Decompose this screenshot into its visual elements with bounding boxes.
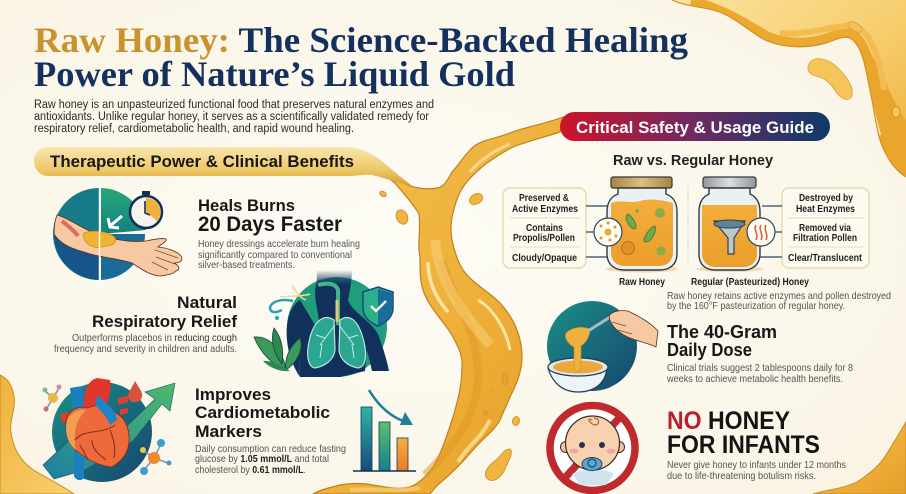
heading (667, 321, 777, 360)
heading (195, 385, 330, 441)
key figure: 20 Days Faster (198, 213, 342, 236)
description: silver-based treatments. (198, 259, 295, 271)
comparison: raw honey features: Propolis/Pollen (513, 232, 575, 244)
description (666, 362, 853, 385)
heading: Heals Burns (198, 196, 295, 215)
icon: lungs with shield and leaves (254, 270, 393, 377)
comparison: raw honey features: Contains (526, 222, 563, 234)
jar labels (619, 276, 809, 288)
heading: Improves (195, 385, 271, 404)
honey: small drops (379, 190, 521, 480)
description: cholesterol by 0.61 mmol/L. (195, 464, 306, 476)
panel: burns (53, 187, 360, 281)
intro paragraph: Raw honey is an unpasteurized functional food that preserves natural enzymes and (34, 99, 434, 111)
description: glucose by 1.05 mmol/L and total (195, 453, 329, 465)
honey: floating drop top right (808, 59, 852, 99)
heading: Daily Dose (667, 339, 752, 360)
icon: regular honey jar (696, 177, 775, 272)
honey: top right flow (672, 0, 906, 177)
warning heading: NO HONEY (667, 407, 790, 435)
panel: respiratory (54, 270, 393, 377)
comparison description: by the 160°F pasteurization of regular honey. (667, 300, 845, 312)
subheading: raw vs regular: Raw vs. Regular Honey (613, 152, 774, 169)
description: Daily consumption can reduce fasting (195, 443, 346, 455)
heading: therapeutic power (34, 147, 412, 186)
description (198, 238, 360, 271)
description: weeks to achieve metabolic health benefits. (666, 373, 843, 385)
description: Honey dressings accelerate burn healing (198, 238, 360, 250)
comparison: regular honey features: Clear/Translucent (788, 252, 862, 264)
icon: spoon pouring honey into bowl (547, 301, 658, 392)
description: significantly compared to conventional (198, 249, 352, 261)
description (54, 332, 237, 355)
heading: Natural (177, 293, 237, 312)
description: frequency and severity in children and adults. (54, 343, 237, 355)
warning heading (667, 407, 820, 459)
heading: Respiratory Relief (92, 312, 237, 331)
comparison: raw honey features: Cloudy/Opaque (512, 252, 577, 264)
comparison: raw honey features: Active Enzymes (512, 203, 578, 215)
honey: bottom left pool (0, 375, 74, 494)
intro paragraph: respiratory relief, cardiometabolic health, and rapid wound healing. (34, 123, 354, 135)
panel: daily dose (547, 301, 853, 392)
description: Never give honey to infants under 12 months (667, 459, 846, 471)
panel: cardiometabolic (42, 378, 416, 482)
divider (687, 183, 689, 264)
description (195, 443, 346, 476)
icon: heart with rising arrow and molecules (42, 378, 175, 482)
comparison description (667, 290, 891, 312)
intro paragraph: antioxidants. Unlike regular honey, it serves as a scientifically validated remedy for (34, 111, 429, 123)
comparison: regular honey features (760, 188, 869, 268)
heading (92, 293, 237, 331)
panel: infant warning (550, 406, 846, 490)
title: Power of Nature’s Liquid Gold (34, 54, 515, 94)
description: Outperforms placebos in reducing cough (72, 332, 237, 344)
intro paragraph (34, 99, 434, 135)
comparison: raw honey features (503, 188, 607, 268)
jar labels: Regular (Pasteurized) Honey (691, 276, 809, 288)
heading: safety guide: Critical Safety & Usage Guide (576, 119, 814, 137)
jar labels: Raw Honey (619, 276, 665, 288)
heading: The 40-Gram (667, 321, 777, 342)
description: due to life-threatening botulism risks. (667, 470, 816, 482)
honey: central stream (313, 117, 563, 494)
title: Raw Honey: The Science-Backed Healing (34, 20, 688, 60)
heading: therapeutic power: Therapeutic Power & Clinical Benefits (50, 152, 354, 171)
comparison: regular honey features: Removed via (799, 222, 851, 234)
bar chart: falling markers (353, 390, 416, 471)
icon: arm with honey dressing and stopwatch (53, 187, 182, 281)
title (34, 20, 688, 94)
comparison: raw honey features: Preserved & (519, 192, 569, 204)
honey: bottom right pool (813, 422, 906, 494)
description: Clinical trials suggest 2 tablespoons daily for 8 (667, 362, 853, 374)
heading: safety guide (560, 112, 830, 141)
comparison: regular honey features: Destroyed by (799, 192, 853, 204)
icon: raw honey jar (594, 177, 678, 272)
icon: baby in prohibition sign (550, 406, 635, 490)
description (667, 459, 846, 482)
comparison: regular honey features: Heat Enzymes (796, 203, 855, 215)
warning heading: FOR INFANTS (667, 431, 820, 459)
heading: Markers (195, 422, 262, 441)
heading: Cardiometabolic (195, 403, 330, 422)
comparison: regular honey features: Filtration Pollen (793, 232, 857, 244)
